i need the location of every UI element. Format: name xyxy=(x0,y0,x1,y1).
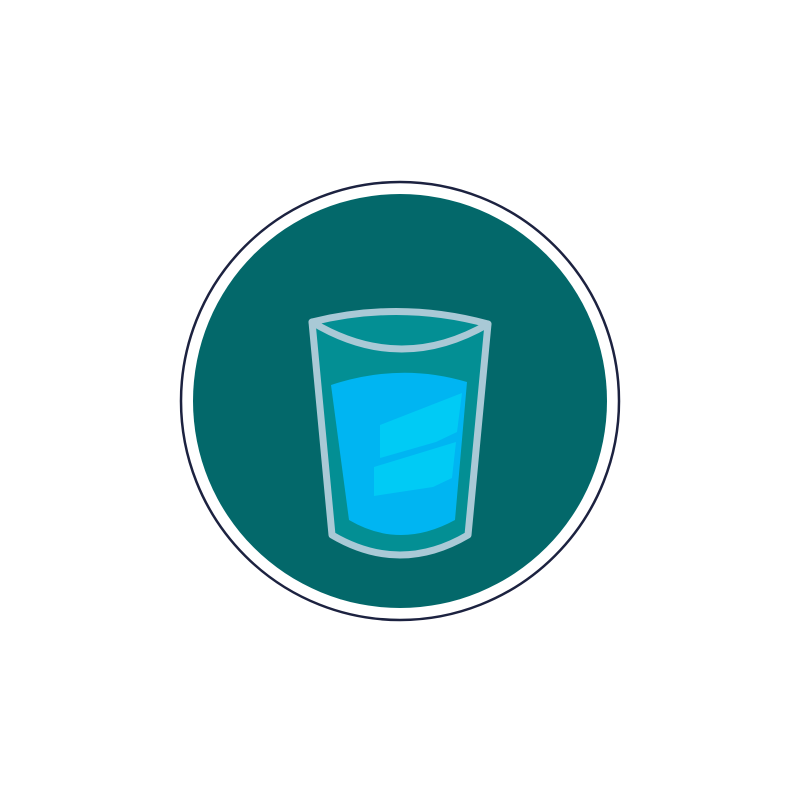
teal disc xyxy=(193,194,607,608)
icon: glass xyxy=(312,311,488,555)
water highlights xyxy=(374,393,462,496)
water xyxy=(331,373,467,535)
outer ring xyxy=(181,182,619,620)
rim inner curve xyxy=(312,322,488,349)
glass body xyxy=(312,311,488,555)
